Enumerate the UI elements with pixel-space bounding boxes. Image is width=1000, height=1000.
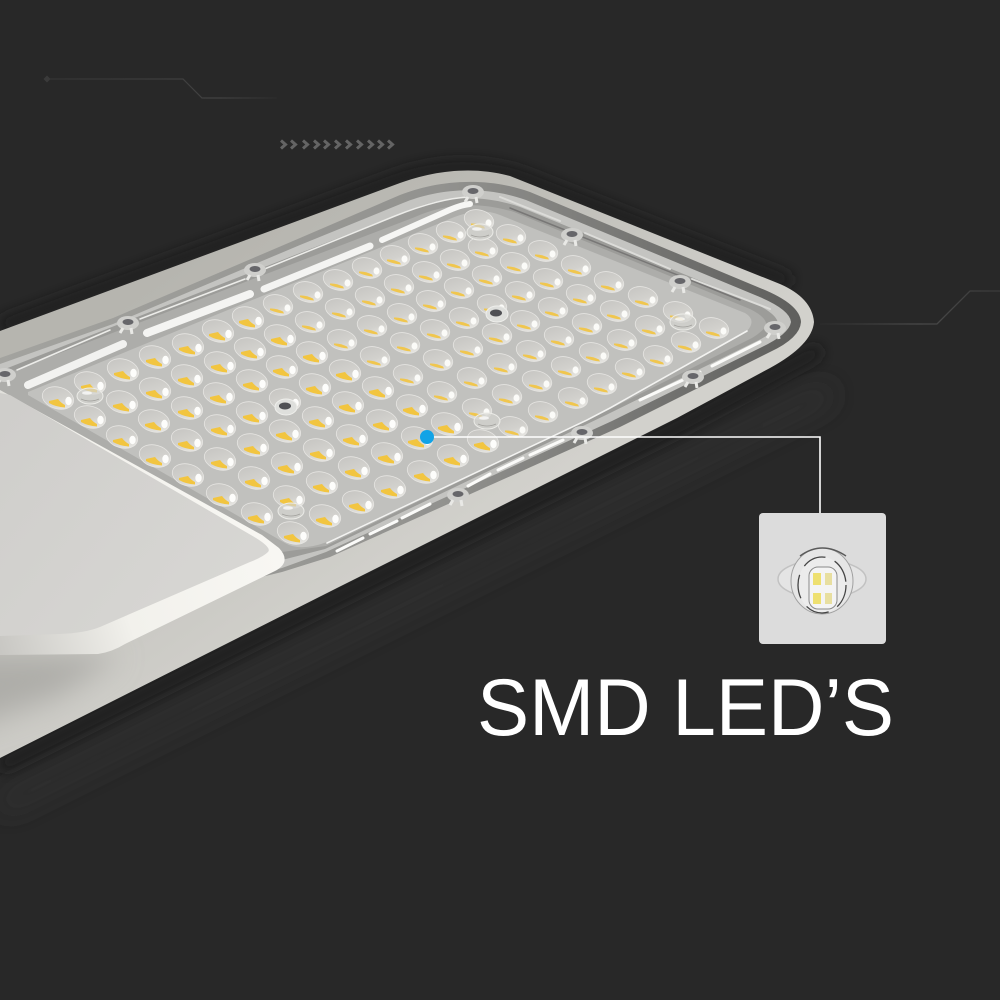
callout connector: [427, 437, 820, 513]
SMD LED close-up thumbnail: [759, 513, 886, 644]
driver box: [0, 390, 285, 655]
frame bolts: [0, 185, 786, 506]
driver box bevel: [0, 390, 285, 655]
frame metal band: [0, 190, 791, 640]
housing: [0, 170, 814, 758]
title: SMD LED’S: [477, 663, 894, 753]
decorative tech line top left: [44, 76, 277, 98]
glass border: [0, 205, 766, 640]
callout blue dot: [420, 430, 434, 444]
street lamp: [0, 170, 814, 758]
lens panel: [28, 211, 752, 547]
reflector highlights: [17, 197, 770, 551]
frame inner channel: [0, 198, 778, 640]
frame groove: [0, 182, 801, 640]
LED lens grid: [40, 206, 731, 548]
driver box top surface: [0, 393, 269, 636]
chevron row: [281, 140, 392, 148]
shadow and glow around lamp: [0, 167, 830, 806]
decorative tech line right: [820, 291, 1000, 324]
clear domes and screws: [77, 224, 696, 519]
housing shade under driver box: [0, 654, 105, 724]
